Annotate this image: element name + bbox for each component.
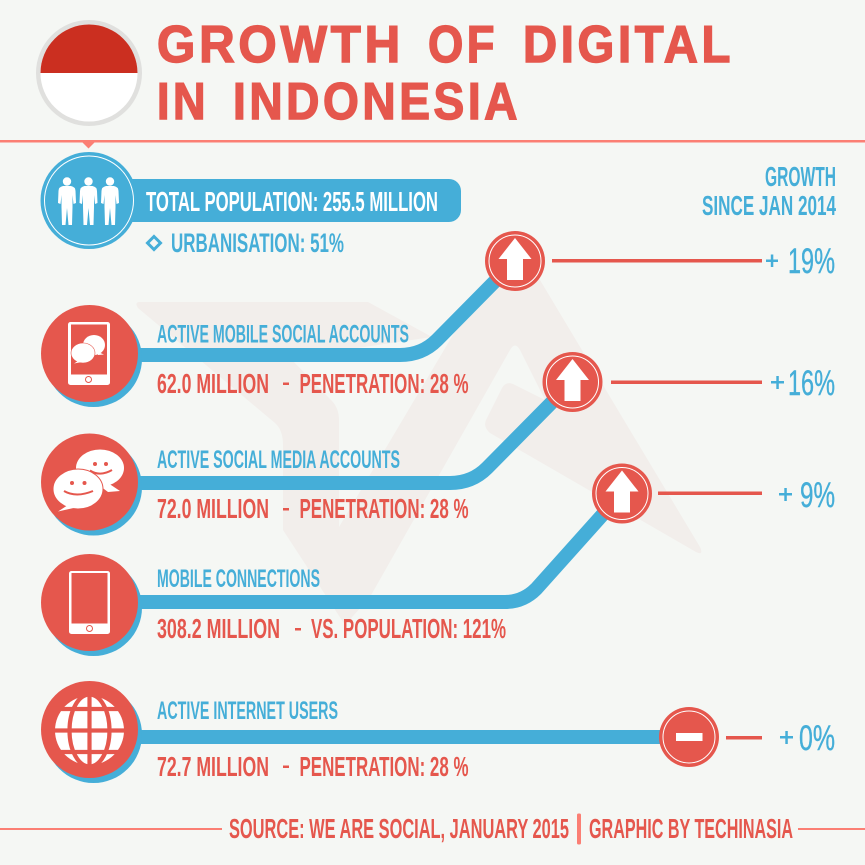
stats: PENETRATION: 28 % — [300, 368, 469, 399]
panel: active internet users — [41, 681, 469, 783]
population circle ring — [44, 156, 134, 245]
title: IN — [157, 73, 209, 131]
circle shadow — [45, 559, 142, 656]
circle shadow — [45, 438, 142, 536]
stats — [157, 368, 469, 399]
stats: 62.0 MILLION — [157, 368, 269, 399]
stats: 72.7 MILLION — [157, 751, 269, 782]
value: 0% — [799, 719, 835, 758]
growth indicator: +16% — [542, 352, 835, 412]
icon: globe — [50, 694, 129, 767]
leader line — [611, 380, 762, 384]
leader line — [658, 492, 762, 495]
footer source line — [0, 813, 865, 844]
growth indicator: +0% — [659, 707, 835, 767]
icon: phone with chat bubbles — [68, 322, 110, 385]
stats — [157, 493, 469, 524]
panel: mobile connections — [41, 554, 506, 656]
footer source line: SOURCE: WE ARE SOCIAL, JANUARY 2015 — [229, 813, 569, 844]
stats: 308.2 MILLION — [157, 613, 280, 644]
icon: diamond bullet — [148, 236, 160, 250]
stats — [157, 751, 469, 782]
growth column heading — [702, 161, 836, 221]
label: MOBILE CONNECTIONS — [157, 565, 320, 593]
growth indicator: +19% — [485, 231, 835, 291]
value — [780, 719, 835, 758]
badge — [592, 464, 652, 524]
value — [766, 242, 835, 281]
stats: VS. POPULATION: 121% — [311, 613, 506, 644]
title: OF — [428, 16, 498, 74]
urbanisation text: URBANISATION: 51% — [171, 228, 344, 258]
icon: up arrow — [606, 470, 638, 512]
panel: total population — [40, 152, 461, 258]
icon: minus — [676, 733, 702, 741]
growth indicator: +9% — [592, 464, 835, 524]
value: 16% — [788, 364, 835, 403]
label: ACTIVE SOCIAL MEDIA ACCOUNTS — [157, 446, 400, 474]
badge — [542, 352, 602, 412]
leader line — [552, 259, 762, 262]
stats: 72.0 MILLION — [157, 493, 269, 524]
icon circle — [41, 434, 138, 530]
label: ACTIVE MOBILE SOCIAL ACCOUNTS — [157, 320, 409, 348]
panel: active social media accounts — [41, 434, 469, 536]
icon: smiling chat bubbles — [53, 450, 124, 512]
stats: PENETRATION: 28 % — [300, 493, 469, 524]
icon: three people — [58, 177, 119, 225]
value — [779, 476, 835, 515]
stats: PENETRATION: 28 % — [300, 751, 469, 782]
value: 9% — [800, 476, 835, 515]
value: 19% — [788, 242, 835, 281]
badge — [485, 231, 545, 291]
title — [157, 16, 734, 131]
icon: up arrow — [498, 238, 532, 280]
icon circle — [41, 554, 138, 651]
circle shadow — [45, 310, 142, 407]
title: INDONESIA — [233, 73, 521, 131]
value — [771, 364, 835, 403]
population bar — [120, 179, 461, 222]
panel: active mobile social accounts — [41, 305, 469, 407]
title: GROWTH — [157, 16, 404, 74]
icon: tablet — [69, 571, 110, 634]
label: ACTIVE INTERNET USERS — [157, 697, 338, 725]
watermark logo — [136, 255, 701, 625]
icon: Indonesian flag — [36, 20, 142, 126]
title: DIGITAL — [523, 16, 734, 74]
population circle — [40, 152, 138, 249]
population text: TOTAL POPULATION: 255.5 MILLION — [146, 186, 438, 217]
connector lines — [130, 261, 690, 737]
icon circle — [41, 681, 138, 778]
header divider — [0, 140, 865, 148]
icon circle — [41, 305, 138, 402]
stats — [157, 613, 506, 644]
leader line — [726, 736, 762, 740]
icon: up arrow — [556, 359, 589, 401]
circle shadow — [45, 686, 142, 783]
badge — [659, 707, 719, 767]
